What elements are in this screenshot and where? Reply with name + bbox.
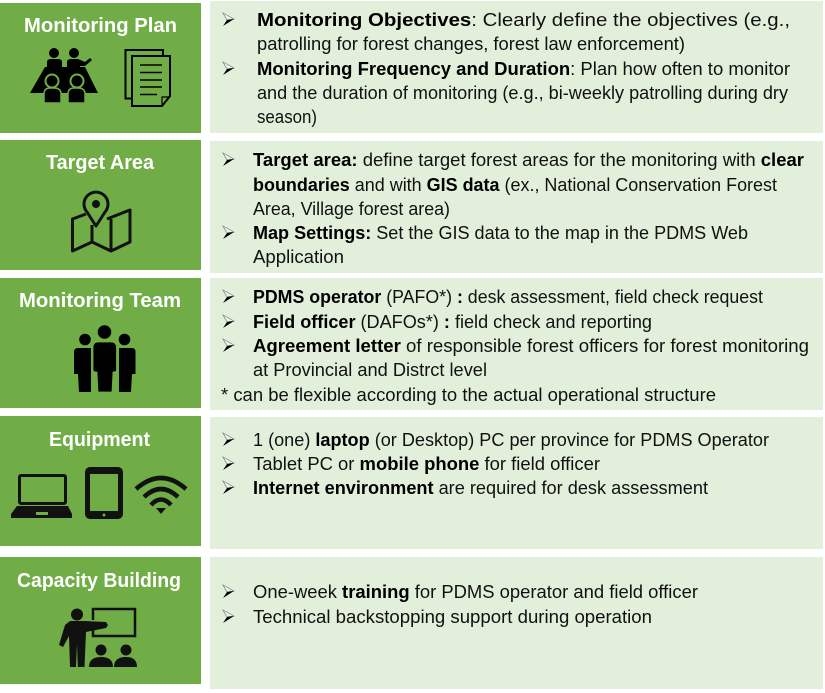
panel: monitoring plan details: Monitoring Objectives : Clearly define the objectives (e.g., bbox=[257, 10, 790, 30]
bullet arrow bbox=[223, 315, 234, 328]
panel: monitoring team details: PDMS operator (PAFO*) : desk assessment, field check request bbox=[253, 287, 763, 307]
bullet arrow bbox=[223, 585, 234, 598]
panel: capacity building details bbox=[210, 557, 823, 689]
heading: capacity building: Capacity Building bbox=[17, 570, 181, 592]
panel: monitoring team details: * can be flexible according to the actual operational structure bbox=[221, 385, 716, 405]
bullet arrow bbox=[223, 290, 234, 303]
panel: monitoring plan details bbox=[210, 1, 823, 133]
bullet arrow bbox=[223, 481, 234, 494]
bullet arrow bbox=[223, 153, 234, 166]
panel: equipment details: Internet environment are required for desk assessment bbox=[253, 478, 708, 498]
icon: meeting people bbox=[30, 48, 98, 103]
icon: map with pin bbox=[72, 192, 130, 251]
bullet arrow bbox=[223, 62, 234, 75]
icon: tablet bbox=[85, 467, 123, 519]
panel: target area details: Target area: define target forest areas for the monitoring with clear bbox=[253, 150, 804, 170]
bullet arrow bbox=[223, 433, 234, 446]
panel: monitoring plan details: season) bbox=[257, 107, 317, 127]
bullet arrow bbox=[223, 226, 234, 239]
panel: target area details: Application bbox=[253, 247, 344, 267]
panel: monitoring team details: Field officer (DAFOs*) : field check and reporting bbox=[253, 312, 652, 332]
panel: target area details: Map Settings: Set the GIS data to the map in the PDMS Web bbox=[253, 223, 748, 243]
panel: equipment details: Tablet PC or mobile phone for field officer bbox=[253, 454, 600, 474]
icon: wifi bbox=[136, 478, 186, 514]
panel: capacity building details: Technical backstopping support during operation bbox=[253, 607, 652, 627]
bullet arrow bbox=[223, 339, 234, 352]
panel: equipment details bbox=[210, 417, 823, 549]
heading: target area: Target Area bbox=[46, 152, 155, 174]
panel: monitoring plan details: Monitoring Frequency and Duration : Plan how often to monitor bbox=[257, 59, 790, 79]
panel: capacity building details: One-week training for PDMS operator and field officer bbox=[253, 582, 698, 602]
panel: monitoring team label bbox=[0, 278, 201, 408]
panel: monitoring team details bbox=[210, 278, 823, 410]
panel: monitoring team details: at Provincial and Distrct level bbox=[253, 360, 487, 380]
heading: monitoring plan: Monitoring Plan bbox=[24, 15, 177, 37]
icon: documents bbox=[126, 50, 170, 106]
panel: monitoring plan details: and the duration of monitoring (e.g., bi-weekly patrolling during dry bbox=[257, 83, 788, 103]
bullet arrow bbox=[223, 13, 234, 26]
panel: target area details bbox=[210, 141, 823, 273]
panel: monitoring plan details: patrolling for forest changes, forest law enforcement) bbox=[257, 34, 685, 54]
heading: equipment: Equipment bbox=[49, 429, 150, 451]
panel: capacity building label bbox=[0, 557, 201, 684]
panel: monitoring team details: Agreement letter of responsible forest officers for forest monitoring bbox=[253, 336, 809, 356]
panel: target area details: boundaries and with GIS data (ex., National Conservation Forest bbox=[253, 175, 777, 195]
bullet arrow bbox=[223, 457, 234, 470]
panel: target area label bbox=[0, 140, 201, 270]
panel: equipment details: 1 (one) laptop (or Desktop) PC per province for PDMS Operator bbox=[253, 430, 769, 450]
icon: laptop bbox=[11, 476, 72, 518]
panel: equipment label bbox=[0, 416, 201, 546]
panel: target area details: Area, Village forest area) bbox=[253, 199, 450, 219]
bullet arrow bbox=[223, 610, 234, 623]
icon: trainer at board bbox=[59, 608, 137, 667]
icon: three people bbox=[74, 325, 136, 392]
heading: monitoring team: Monitoring Team bbox=[19, 290, 181, 312]
panel: monitoring plan label bbox=[0, 3, 201, 133]
